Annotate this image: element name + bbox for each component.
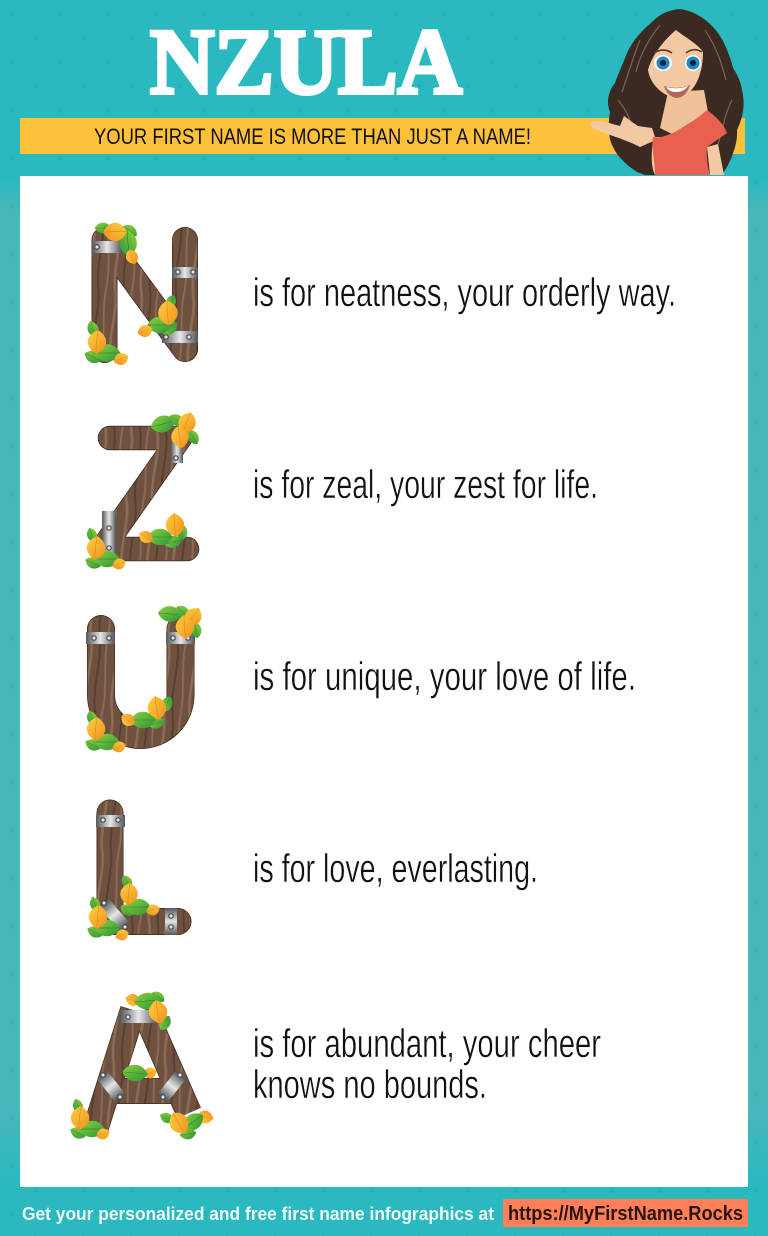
- icon: wooden letter Z: [83, 409, 202, 572]
- row: letter Z: [83, 409, 598, 572]
- text: A lines: knows no bounds.: [253, 1063, 487, 1107]
- text: U line: is for unique, your love of life.: [253, 655, 636, 699]
- text: Z line: is for zeal, your zest for life.: [253, 463, 598, 507]
- title: NZULA: [150, 11, 462, 114]
- tagline band: YOUR FIRST NAME IS MORE THAN JUST A NAME!: [94, 124, 531, 149]
- icon: wooden letter U: [83, 603, 206, 755]
- row: letter A: [68, 989, 601, 1142]
- text: A lines: is for abundant, your cheer: [253, 1022, 601, 1066]
- footer text: Get your personalized and free first name infographics at: [22, 1204, 494, 1224]
- illustration: woman presenting: [590, 9, 744, 175]
- footer link badge: https://MyFirstName.Rocks: [508, 1203, 743, 1225]
- row: letter U: [83, 603, 636, 755]
- white content panel: [20, 176, 748, 1187]
- icon: wooden letter N: [82, 222, 198, 367]
- text: A lines: [253, 1022, 601, 1107]
- tagline band: [20, 118, 745, 154]
- icon: wooden letter A: [68, 989, 214, 1142]
- text: L line: is for love, everlasting.: [253, 847, 538, 891]
- row: letter N: [82, 222, 676, 367]
- row: letter L: [85, 813, 538, 943]
- icon: wooden letter L: [85, 813, 178, 943]
